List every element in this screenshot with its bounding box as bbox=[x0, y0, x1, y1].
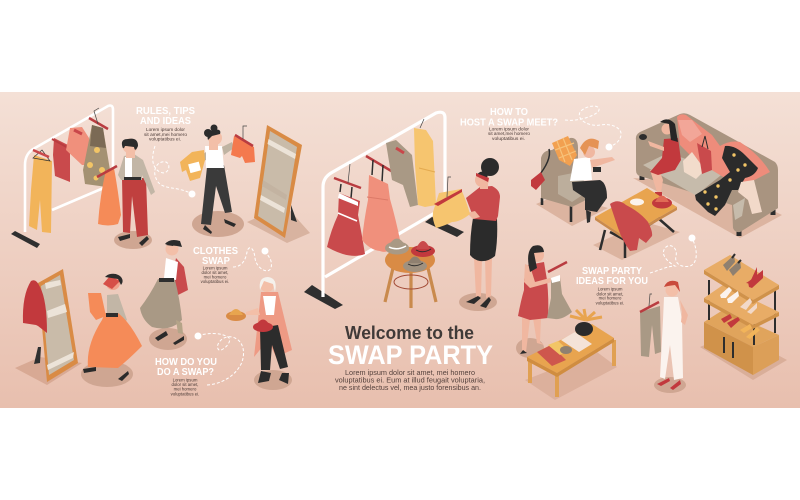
title: rules, tips and ideas: sit amet,mei homero bbox=[144, 132, 188, 137]
grey dress held bbox=[547, 262, 572, 319]
dashed connector: host bbox=[565, 106, 621, 150]
title: how do you do a swap: voluptatibus ei. bbox=[171, 391, 199, 396]
clothes on table bbox=[537, 332, 592, 366]
title: how do you do a swap: HOW DO YOU bbox=[155, 357, 217, 368]
person: woman in red trousers bbox=[97, 138, 155, 249]
red hat bbox=[652, 196, 672, 208]
main title block: Welcome to the bbox=[345, 322, 474, 343]
blanket bbox=[552, 136, 577, 166]
taupe hat bbox=[403, 256, 427, 272]
title: how do you do a swap bbox=[155, 357, 217, 396]
pink dress bbox=[362, 156, 400, 252]
title: how to host a swap meet: voluptatibus ei. bbox=[492, 136, 525, 141]
main title block: SWAP PARTY bbox=[328, 340, 493, 370]
dashed connector: how do you bbox=[194, 332, 244, 385]
hat: red bbox=[253, 320, 273, 332]
clothes rack: centre bbox=[304, 112, 464, 309]
title: clothes swap: CLOTHES bbox=[193, 246, 238, 257]
red jacket on mirror bbox=[23, 280, 47, 333]
title: swap party ideas for you: IDEAS FOR YOU bbox=[576, 276, 648, 287]
title: swap party ideas for you: dolor sit amet, bbox=[596, 291, 624, 296]
title: swap party ideas for you: mei homero bbox=[599, 296, 622, 301]
mirror: top bbox=[247, 125, 310, 243]
person: woman in beige skirt bbox=[140, 240, 188, 350]
title: rules, tips and ideas: Lorem ipsum dolor bbox=[146, 127, 186, 132]
title: clothes swap: voluptatibus ei. bbox=[201, 279, 229, 284]
title: rules, tips and ideas: AND IDEAS bbox=[140, 116, 191, 127]
title: clothes swap: mei homero bbox=[204, 274, 227, 279]
yellow dress bbox=[414, 119, 436, 207]
person: woman in orange dress bbox=[81, 274, 142, 387]
woman on sofa bbox=[639, 119, 681, 196]
person: woman in black trousers bbox=[180, 124, 255, 237]
title: swap party ideas for you: Lorem ipsum bbox=[598, 286, 623, 292]
title: rules, tips and ideas: RULES, TIPS bbox=[136, 106, 195, 117]
white jacket on sofa arm bbox=[738, 180, 762, 214]
beige jacket bbox=[386, 140, 418, 207]
main title block: voluptatibus ei. Eum at illud feugait voluptaria, bbox=[335, 375, 485, 384]
title: how do you do a swap: dolor sit amet, bbox=[172, 382, 198, 387]
dashed connector: swap party bbox=[650, 234, 696, 273]
shoe shelf bbox=[700, 254, 787, 380]
person: woman with white hair bbox=[226, 277, 292, 390]
title: how to host a swap meet: HOW TO bbox=[490, 107, 528, 118]
red top bbox=[52, 138, 72, 182]
table with jewellery and feathers bbox=[525, 309, 617, 400]
main title block: ne sint delectus vel, mea justo forensibus an. bbox=[339, 383, 481, 392]
feathers in black pot bbox=[570, 309, 602, 336]
title: clothes swap: Lorem ipsum bbox=[203, 266, 228, 270]
title: clothes swap: dolor sit amet, bbox=[202, 270, 228, 275]
person: woman in white jumpsuit bbox=[640, 281, 688, 393]
yellow top held bbox=[180, 150, 205, 181]
armchair with seated woman bbox=[531, 136, 615, 226]
title: swap party ideas for you: voluptatibus ei. bbox=[596, 300, 624, 305]
floral dress bbox=[83, 108, 110, 187]
hat: yellow bbox=[226, 309, 246, 321]
title: how to host a swap meet: Lorem ipsum dolor bbox=[489, 126, 530, 132]
sofa with seated woman bbox=[633, 113, 782, 238]
orange shorts held bbox=[231, 126, 255, 163]
title: how do you do a swap: mei homero bbox=[174, 386, 197, 392]
title: swap party ideas for you bbox=[576, 266, 648, 305]
title: how to host a swap meet bbox=[460, 107, 558, 141]
orange dress held bbox=[97, 166, 121, 226]
grey hat bbox=[385, 238, 409, 254]
main title block bbox=[328, 322, 493, 392]
background panel bbox=[0, 92, 800, 408]
mirror: bottom left bbox=[15, 269, 82, 385]
shoes bbox=[720, 254, 763, 339]
title: rules, tips and ideas: voluptatibus ei. bbox=[149, 137, 181, 142]
coffee table with red jacket and hat bbox=[593, 188, 680, 260]
title: how to host a swap meet: HOST A SWAP MEET? bbox=[460, 118, 558, 128]
stool with hats bbox=[385, 238, 436, 308]
dashed connector: clothes swap bbox=[233, 248, 271, 271]
red jacket bbox=[610, 201, 652, 251]
dashed connector: rules bbox=[153, 146, 196, 198]
title: clothes swap bbox=[193, 246, 238, 284]
title: clothes swap: SWAP bbox=[202, 256, 230, 267]
title: rules, tips and ideas bbox=[136, 106, 195, 142]
title: swap party ideas for you: SWAP PARTY bbox=[582, 266, 642, 277]
pink cushions bbox=[677, 114, 770, 185]
title: how to host a swap meet: sit amet,mei homero bbox=[488, 131, 531, 136]
shopping bags bbox=[683, 136, 712, 179]
title: how do you do a swap: DO A SWAP? bbox=[157, 367, 214, 378]
grey trousers held bbox=[640, 294, 661, 357]
red hat bbox=[411, 241, 435, 257]
title: how do you do a swap: Lorem ipsum bbox=[173, 378, 198, 382]
clothes rack: top left bbox=[11, 106, 113, 248]
jumpsuit bbox=[29, 150, 52, 233]
black star dress bbox=[695, 146, 758, 216]
main title block: Lorem ipsum dolor sit amet, mei homero bbox=[345, 368, 475, 377]
person: woman in black skirt bbox=[433, 158, 500, 311]
pink top bbox=[66, 127, 90, 165]
person: woman in red dress bbox=[516, 245, 572, 358]
red dress bbox=[327, 164, 365, 256]
red bag bbox=[531, 149, 550, 190]
yellow skirt held bbox=[433, 177, 470, 228]
